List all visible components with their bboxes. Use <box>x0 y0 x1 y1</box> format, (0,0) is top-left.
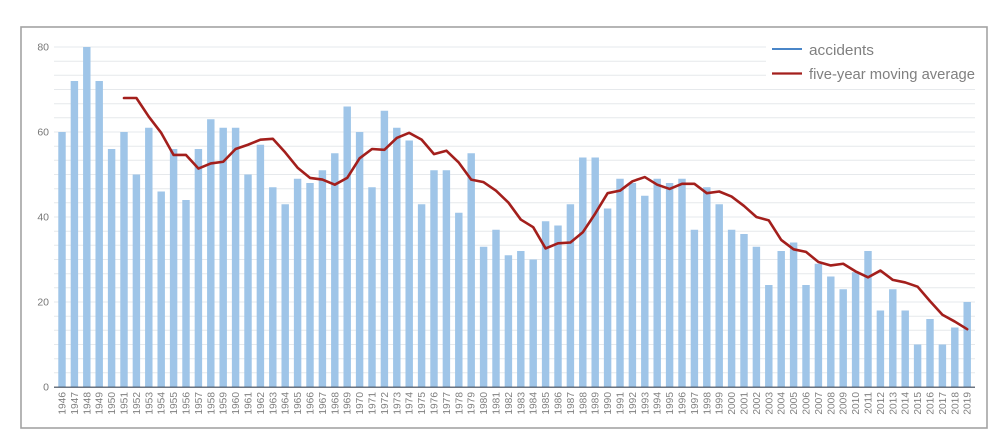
x axis year labels: 1982 <box>504 392 515 415</box>
x axis year labels: 1975 <box>417 392 428 415</box>
x axis baseline <box>54 386 975 388</box>
x axis year labels: 2011 <box>864 392 874 414</box>
x axis year labels: 2010 <box>851 392 862 415</box>
x axis year labels: 1981 <box>492 392 502 415</box>
x axis year labels: 1966 <box>306 392 316 415</box>
x axis year labels: 1956 <box>182 392 192 415</box>
x axis year labels: 1984 <box>529 392 540 415</box>
legend: accidents <box>772 42 874 59</box>
x axis year labels: 1970 <box>355 392 366 415</box>
x axis year labels: 2019 <box>963 392 974 415</box>
x axis year labels: 1993 <box>640 392 651 415</box>
x axis year labels: 1963 <box>268 392 279 415</box>
x axis year labels: 1985 <box>541 392 552 415</box>
x axis year labels: 1950 <box>107 392 118 415</box>
x axis year labels: 1972 <box>380 392 391 415</box>
x axis year labels: 2003 <box>764 392 775 415</box>
x axis year labels: 1952 <box>132 392 143 415</box>
x axis year labels: 2006 <box>802 392 812 415</box>
x axis year labels: 2012 <box>876 392 887 415</box>
x axis year labels: 1968 <box>330 392 341 415</box>
x axis year labels: 2017 <box>938 392 949 415</box>
x axis year labels: 1954 <box>157 392 168 415</box>
x axis year labels: 1959 <box>219 392 230 415</box>
legend: five-year moving average: five-year moving average <box>809 66 975 83</box>
x axis year labels: 1996 <box>678 392 688 415</box>
x axis year labels: 1951 <box>120 392 130 415</box>
x axis year labels: 1974 <box>405 392 416 415</box>
x axis year labels: 1957 <box>194 392 205 415</box>
x axis year labels: 1965 <box>293 392 304 415</box>
x axis year labels: 2007 <box>814 392 825 415</box>
x axis year labels: 1976 <box>430 392 440 415</box>
x axis year labels: 1960 <box>231 392 242 415</box>
x axis year labels: 2002 <box>752 392 763 415</box>
x axis year labels: 1955 <box>169 392 180 415</box>
x axis year labels: 1964 <box>281 392 292 415</box>
x axis year labels: 1992 <box>628 392 639 415</box>
y axis labels <box>37 42 49 394</box>
bar chart: accidents <box>58 47 971 387</box>
x axis year labels: 1979 <box>467 392 478 415</box>
x axis year labels: 1989 <box>591 392 602 415</box>
x axis year labels: 2000 <box>727 392 738 415</box>
x axis year labels: 2016 <box>926 392 936 415</box>
x axis year labels: 1990 <box>603 392 614 415</box>
x axis year labels: 1967 <box>318 392 329 415</box>
x axis year labels: 1998 <box>702 392 713 415</box>
x axis year labels: 1997 <box>690 392 701 415</box>
x axis year labels: 2015 <box>913 392 924 415</box>
x axis year labels: 2001 <box>740 392 750 415</box>
x axis year labels: 2009 <box>839 392 850 415</box>
x axis year labels: 1973 <box>392 392 403 415</box>
x axis year labels: 1987 <box>566 392 577 415</box>
y axis labels: 20 <box>37 296 49 308</box>
x axis year labels: 1948 <box>82 392 93 415</box>
x axis year labels: 1999 <box>715 392 726 415</box>
x axis year labels: 1991 <box>616 392 626 415</box>
x axis year labels: 1961 <box>244 392 254 415</box>
x axis year labels: 1978 <box>454 392 465 415</box>
x axis year labels: 1983 <box>516 392 527 415</box>
x axis year labels: 2008 <box>826 392 837 415</box>
x axis year labels: 1958 <box>206 392 217 415</box>
x axis year labels: 1962 <box>256 392 267 415</box>
x axis year labels: 1946 <box>58 392 68 415</box>
legend: accidents: accidents <box>809 42 874 59</box>
x axis year labels: 1986 <box>554 392 564 415</box>
y axis labels: 80 <box>37 42 49 54</box>
x axis year labels: 1969 <box>343 392 354 415</box>
y axis labels: 60 <box>37 126 49 138</box>
x axis year labels: 1988 <box>578 392 589 415</box>
x axis year labels: 1953 <box>144 392 155 415</box>
x axis year labels: 1947 <box>70 392 81 415</box>
x axis year labels: 2005 <box>789 392 800 415</box>
x axis year labels: 2014 <box>901 392 912 415</box>
y axis labels: 40 <box>37 212 49 224</box>
x axis year labels: 1971 <box>368 392 378 415</box>
x axis year labels: 2013 <box>888 392 899 415</box>
x axis year labels: 1980 <box>479 392 490 415</box>
x axis year labels <box>58 392 974 415</box>
x axis year labels: 1994 <box>653 392 664 415</box>
x axis year labels: 1977 <box>442 392 453 415</box>
x axis year labels: 2018 <box>950 392 961 415</box>
x axis year labels: 1949 <box>95 392 106 415</box>
y axis labels: 0 <box>43 382 49 394</box>
x axis year labels: 2004 <box>777 392 788 415</box>
line chart: five-year moving average <box>124 98 967 329</box>
legend <box>772 42 975 83</box>
x axis year labels: 1995 <box>665 392 676 415</box>
